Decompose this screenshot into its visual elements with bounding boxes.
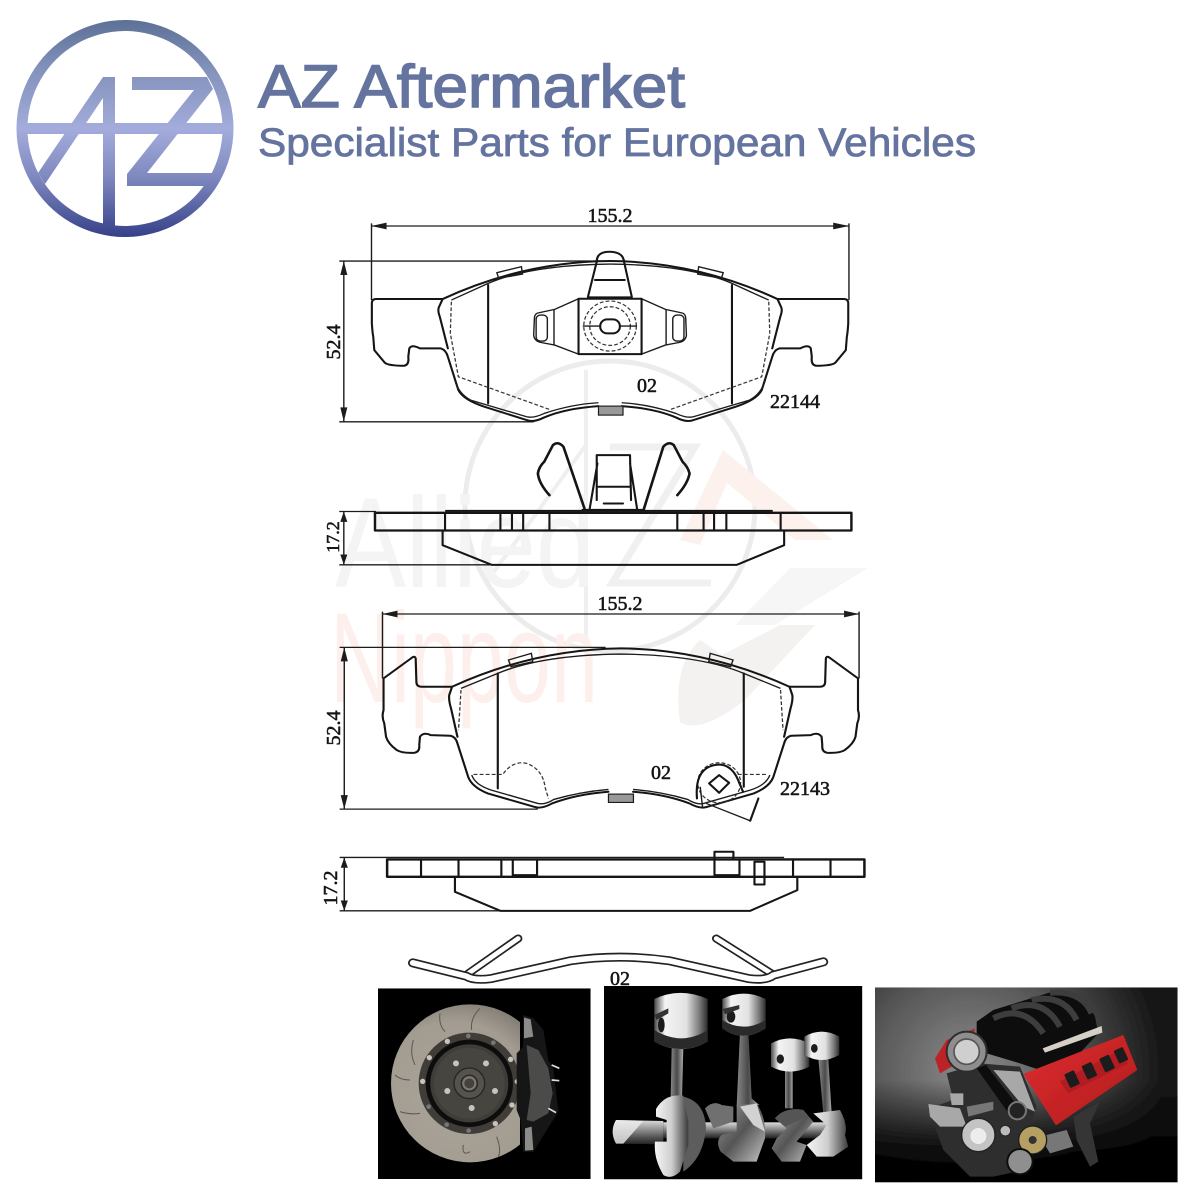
dimension: 52.4 top: 52.4 — [323, 324, 345, 360]
watermark: Allied Nippon: Allied — [335, 472, 595, 615]
photo: pistons and crankshaft — [604, 986, 862, 1179]
dimension: 17.2 top: 17.2 — [323, 521, 343, 553]
label: 02 lower: 02 — [651, 762, 671, 784]
photo: red V8 engine — [875, 987, 1178, 1182]
watermark: Allied Nippon: Nippon — [330, 587, 598, 730]
drawing: anti-rattle clip top — [538, 443, 690, 510]
label: 02 top: 02 — [637, 375, 657, 397]
label: 22143: 22143 — [780, 778, 830, 800]
watermark: Allied Nippon — [330, 361, 868, 730]
drawing: brake pad 22144 front view — [339, 223, 849, 422]
subheading: specialist parts: Specialist Parts for European Vehicles — [258, 121, 976, 165]
photo: brake disc and caliper — [378, 988, 591, 1179]
label: 22144: 22144 — [770, 391, 820, 413]
drawing: pad side view 22144 — [339, 511, 851, 565]
label: 02 spring clip: 02 — [610, 968, 630, 990]
drawing: pad side view 22143 — [340, 852, 864, 911]
drawing: spring clip lower — [413, 939, 823, 979]
dimension: 155.2 top: 155.2 — [588, 205, 632, 227]
heading: AZ Aftermarket: AZ Aftermarket — [258, 53, 685, 120]
dimension: 17.2 lower: 17.2 — [320, 870, 342, 906]
drawing: brake pad 22143 front view — [340, 611, 859, 821]
dimension: 155.2 lower: 155.2 — [598, 593, 642, 615]
logo: AZ circle — [17, 20, 234, 237]
dimension: 52.4 lower: 52.4 — [323, 710, 345, 746]
